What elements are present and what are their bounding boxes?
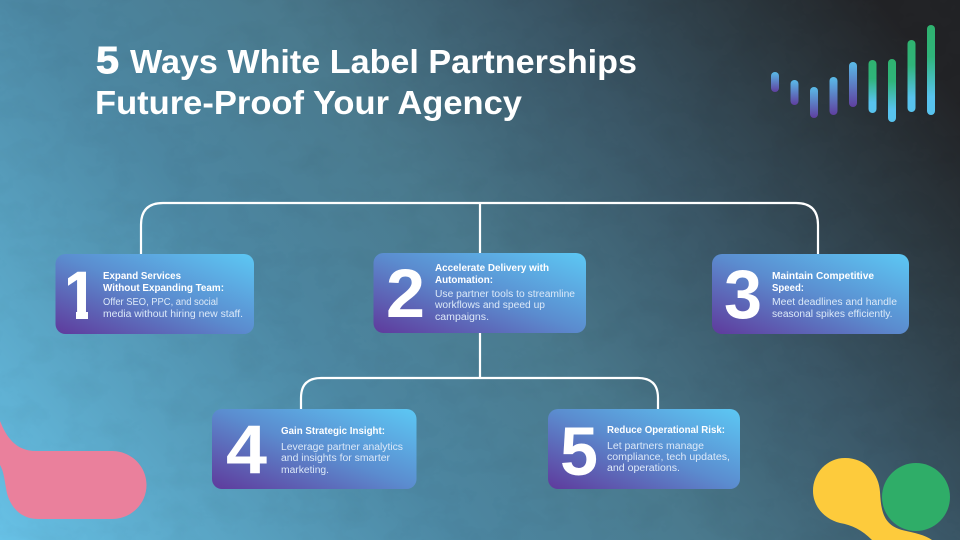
card 2 text: Use partner tools to streamline bbox=[435, 289, 575, 300]
card 4 text: and insights for smarter bbox=[281, 453, 391, 464]
card 5 text: and operations. bbox=[607, 463, 680, 474]
card 1 text: Without Expanding Team: bbox=[103, 283, 224, 294]
number 5: 5 bbox=[560, 413, 598, 490]
title: Future-Proof Your Agency bbox=[95, 84, 523, 121]
card 3 text bbox=[772, 271, 897, 320]
card 1 text: media without hiring new staff. bbox=[103, 309, 243, 320]
card 2 text: campaigns. bbox=[435, 312, 489, 323]
decoration: green circle bbox=[882, 463, 950, 531]
card 5 bbox=[548, 409, 740, 490]
number 1: 1 bbox=[62, 257, 98, 334]
card 3 text: Speed: bbox=[772, 283, 804, 294]
number 3: 3 bbox=[724, 256, 762, 333]
number 2: 2 bbox=[386, 255, 425, 332]
decoration: pink blob bbox=[0, 421, 146, 519]
title bbox=[95, 40, 637, 121]
card 3 text: Maintain Competitive bbox=[772, 271, 874, 282]
card 1 bbox=[56, 254, 254, 334]
card 4 text: Leverage partner analytics bbox=[281, 442, 403, 453]
card 4 text: marketing. bbox=[281, 465, 329, 476]
card 3 text: Meet deadlines and handle bbox=[772, 297, 897, 308]
card 5 text: compliance, tech updates, bbox=[607, 452, 730, 463]
card 4 text bbox=[281, 426, 403, 476]
connector lines bbox=[141, 203, 818, 410]
card 2 text: Automation: bbox=[435, 275, 493, 286]
card 2 bbox=[374, 253, 586, 333]
title: Ways White Label Partnerships bbox=[130, 43, 637, 80]
card 5 text: Let partners manage bbox=[607, 441, 704, 452]
card 3 text: seasonal spikes efficiently. bbox=[772, 309, 892, 320]
card 2 text: workflows and speed up bbox=[434, 300, 545, 311]
card 4 text: Gain Strategic Insight: bbox=[281, 426, 385, 437]
card 2 text bbox=[434, 263, 575, 323]
card 3 bbox=[712, 254, 909, 334]
card 5 text: Reduce Operational Risk: bbox=[607, 425, 725, 436]
card 1 text: Offer SEO, PPC, and social bbox=[103, 297, 218, 308]
card 2 text: Accelerate Delivery with bbox=[435, 263, 549, 274]
decoration: yellow blob bbox=[813, 458, 932, 540]
icon: equalizer bars bbox=[771, 25, 935, 122]
card 4 bbox=[212, 409, 416, 489]
card 1 text bbox=[103, 271, 243, 320]
title: 5 bbox=[96, 40, 119, 82]
number 4: 4 bbox=[226, 411, 267, 488]
card 5 text bbox=[607, 425, 730, 474]
card 1 text: Expand Services bbox=[103, 271, 181, 282]
